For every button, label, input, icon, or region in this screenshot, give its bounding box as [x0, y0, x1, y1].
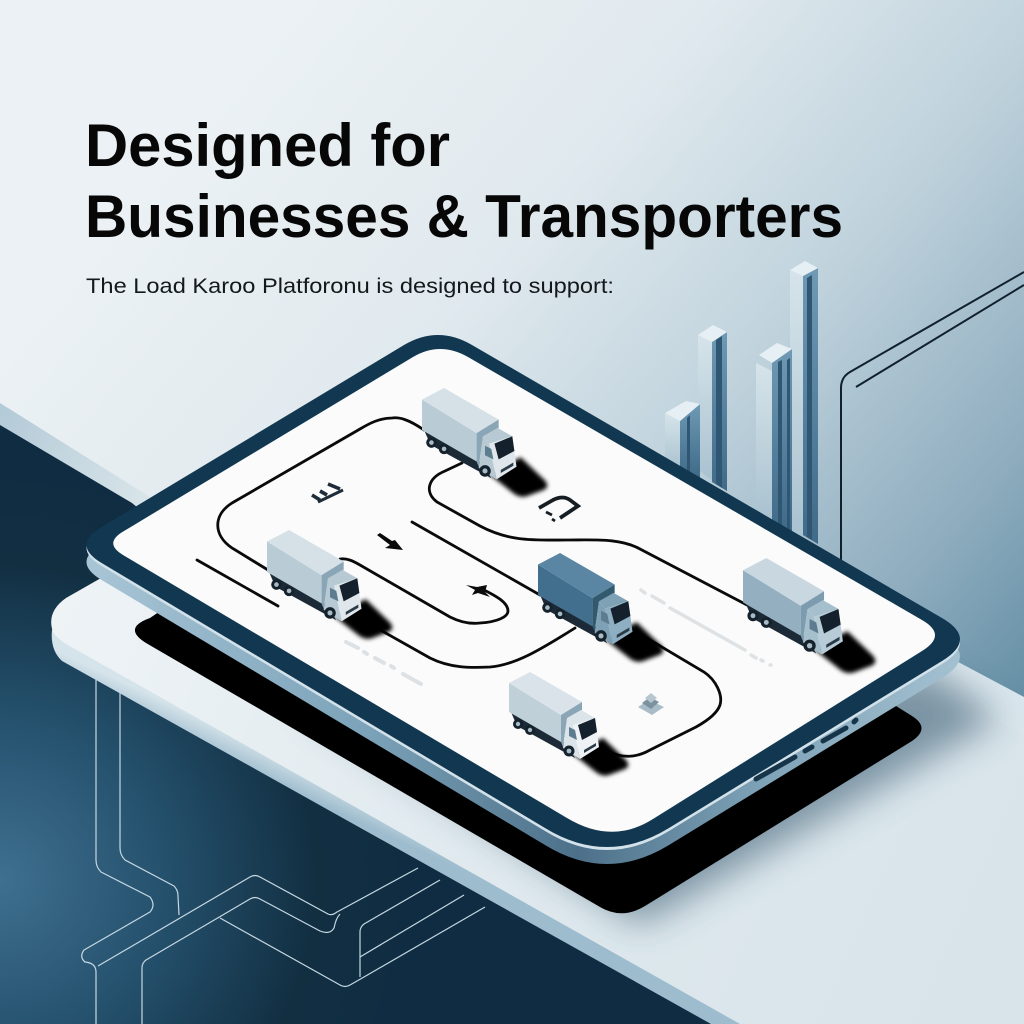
- light strip above dark panel: [0, 403, 150, 510]
- route: left truck loop: [340, 559, 508, 623]
- desk surface: [51, 550, 1024, 1024]
- tablet side edge: [86, 352, 960, 864]
- bar: front right: [756, 343, 792, 532]
- tablet ports: [756, 720, 856, 779]
- black tablet shadow: [135, 420, 921, 913]
- bar: back right: [790, 261, 818, 544]
- icon: arrow two: [466, 585, 490, 597]
- dashed road marks: right: [641, 590, 771, 665]
- tablet: [86, 335, 960, 864]
- icon: small pallet rack: [312, 484, 343, 502]
- skyline bar chart: [665, 261, 818, 544]
- route: straight to centre truck: [412, 522, 540, 595]
- title: Businesses & Transporters: [85, 183, 843, 250]
- truck: right: [743, 558, 875, 673]
- circuit lines on dark panel: [82, 675, 485, 1024]
- truck: top: [422, 388, 547, 497]
- icon: arrow one: [377, 533, 403, 550]
- desk side edge: [52, 620, 770, 1024]
- route: centre truck to bottom truck: [610, 634, 721, 756]
- bar: front left: [665, 401, 700, 478]
- title: [85, 112, 843, 250]
- tablet frame: [86, 335, 960, 847]
- route: short stub: [197, 560, 278, 606]
- route map: [197, 418, 747, 756]
- truck: centre blue: [538, 553, 663, 662]
- icon: magnet arch: [539, 498, 578, 521]
- route: top truck to left truck: [218, 418, 424, 570]
- subtitle: The Load Karoo Platforonu is designed to support:: [86, 275, 614, 298]
- right wall outline: [841, 272, 1024, 560]
- title: Designed for: [85, 112, 450, 179]
- route: left truck to centre truck: [375, 627, 575, 667]
- tablet highlight edge: [86, 338, 960, 850]
- dark floor panel: [0, 425, 760, 1024]
- route: top truck to right truck: [429, 463, 747, 605]
- tablet screen: [113, 349, 935, 832]
- soft shadow on desk: [300, 670, 1000, 925]
- dashed road marks: left: [346, 642, 421, 684]
- desk right light band: [945, 655, 1024, 735]
- truck: bottom: [509, 672, 628, 776]
- truck: left: [267, 530, 392, 639]
- bar: back left: [698, 325, 727, 491]
- icon: small package: [638, 693, 664, 715]
